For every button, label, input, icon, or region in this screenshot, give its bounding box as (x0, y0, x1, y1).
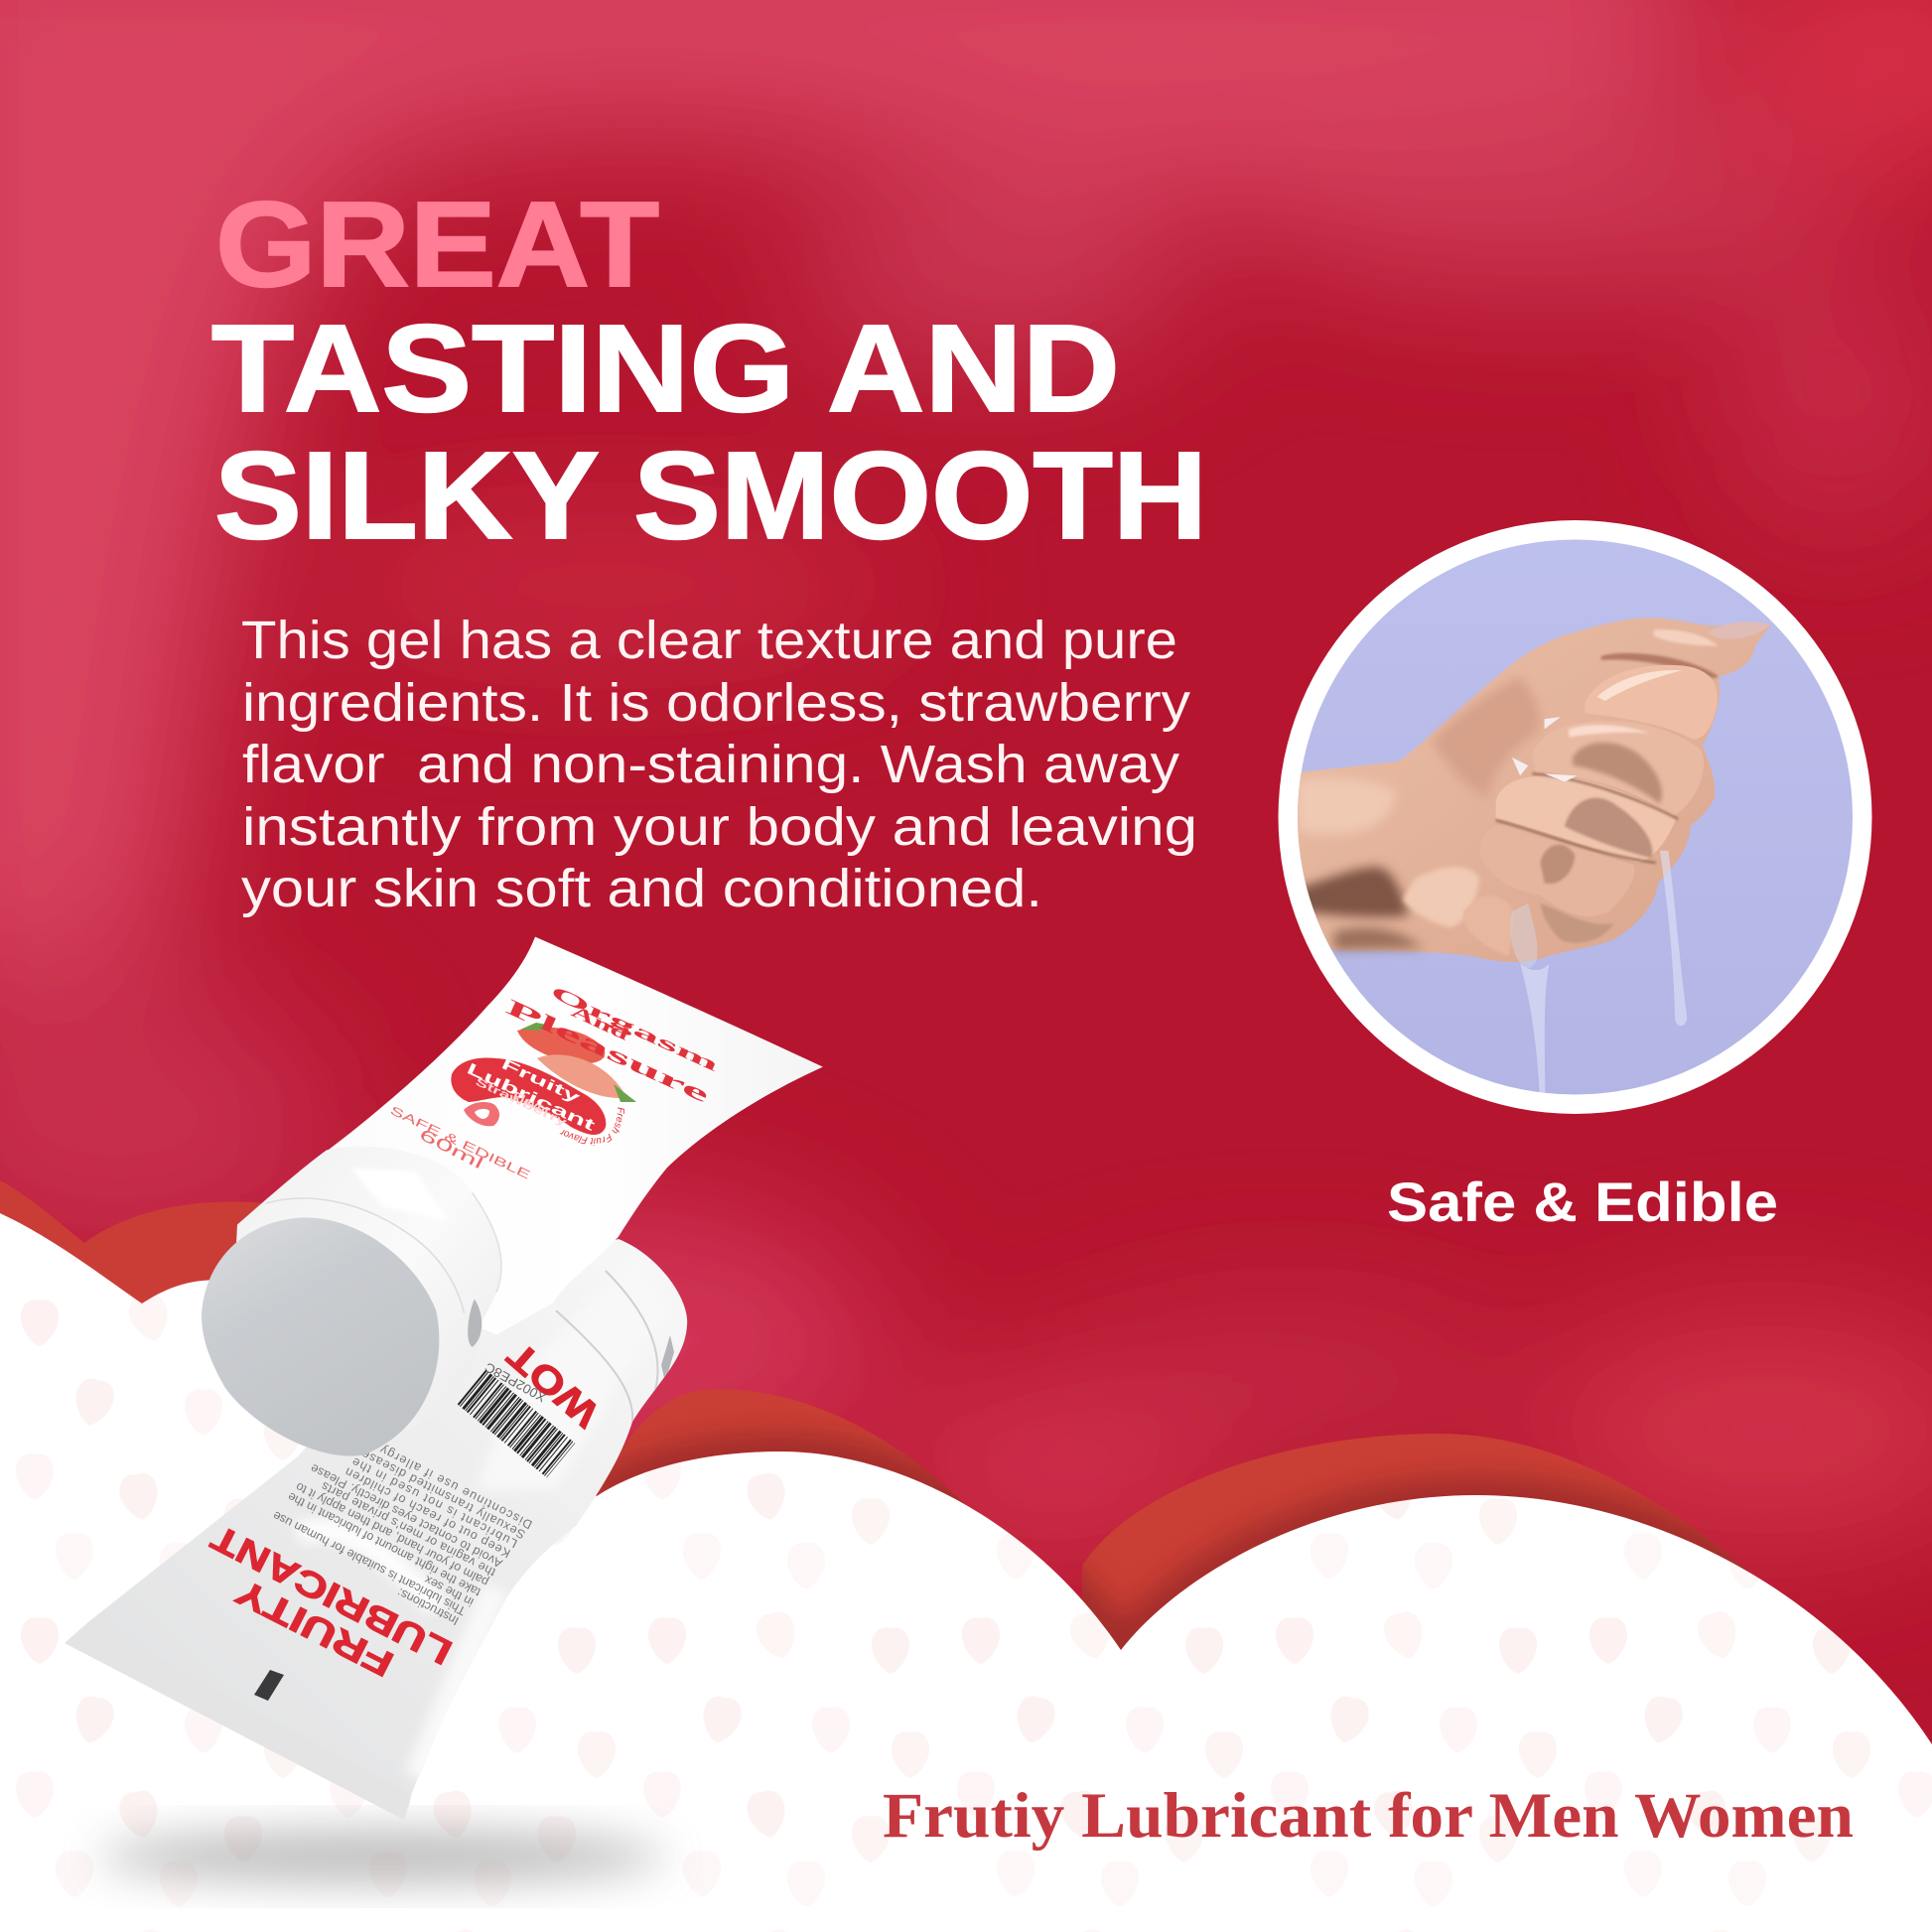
front tube label text: Flavor (511, 1090, 553, 1118)
barcode number: X002PE8C (483, 1359, 548, 1405)
title: SILKY SMOOTH (214, 427, 1207, 565)
front tube label text: Fresh Fruit Flavor (560, 1107, 624, 1146)
back tube barcode (472, 1387, 561, 1460)
description paragraph: This gel has a clear texture and pure (241, 611, 1177, 670)
front tube label text: Strawberry (474, 1076, 570, 1130)
back tube instructions (271, 1443, 534, 1628)
white wave panel with strawberry pattern (0, 1213, 1932, 1932)
back tube instructions: take the right amount of lubricant in the (286, 1489, 483, 1599)
back tube label: WOT: WOT (500, 1333, 608, 1435)
caption: Safe & Edible: Safe & Edible (1387, 1171, 1778, 1233)
back tube crimp mark (254, 1670, 284, 1701)
product: back lubricant tube (65, 1239, 687, 1820)
back tube instructions: Lubricant is not used in the (349, 1454, 519, 1551)
description paragraph: ingredients. It is odorless, strawberry (242, 673, 1190, 733)
back tube instructions: This lubricant is suitable for human use (271, 1508, 468, 1618)
back tube instructions: Discontinue use if allergy (377, 1443, 534, 1532)
description paragraph: your skin soft and conditioned. (241, 859, 1042, 918)
back tube label: fruity lubricant: FRUITY (229, 1572, 400, 1685)
left orange-red wave band (0, 1180, 477, 1390)
back tube instructions: the vagina or men's private parts (319, 1479, 497, 1580)
front tube label text (388, 981, 722, 1182)
floor shadow under tubes (99, 1831, 665, 1882)
front tube label text: Lubricant (464, 1060, 599, 1135)
product: front lubricant tube (202, 937, 823, 1456)
orange-red wave bands (597, 1389, 1749, 1650)
description paragraph: instantly from your body and leaving (242, 797, 1197, 857)
front tube label text: Orgasm (547, 981, 722, 1075)
front tube label text: Pleasure (502, 994, 714, 1108)
title: TASTING AND (211, 300, 1120, 438)
photo: hand squeezing gel in circle (1279, 520, 1872, 1114)
front tube label text: SAFE & EDIBLE (388, 1103, 533, 1182)
title: GREAT (215, 177, 659, 312)
front tube label art: strawberry and heart (451, 1023, 636, 1135)
back tube instructions: Avoid to contact eyes directly. Please (308, 1461, 504, 1571)
description paragraph (241, 611, 1197, 918)
back tube instructions: Keep out of reach of children (343, 1464, 512, 1561)
front tube label text: 60ml (416, 1126, 485, 1173)
title (211, 177, 1207, 565)
back tube label: fruity lubricant (205, 1517, 459, 1685)
front tube label text: Fruity (498, 1055, 584, 1107)
description paragraph: flavor and non-staining. Wash away (242, 735, 1179, 794)
front tube label text: And (568, 1001, 633, 1044)
footer tagline: Frutiy Lubricant for Men Women (883, 1780, 1854, 1852)
back tube instructions: palm of your hand, and then apply it to (294, 1479, 490, 1589)
back tube instructions: in the sex (422, 1573, 476, 1609)
back tube label: fruity lubricant: LUBRICANT (205, 1517, 459, 1673)
back tube instructions: Sexually transmitted diseases (353, 1444, 527, 1542)
back tube instructions: Instructions: (395, 1586, 461, 1628)
